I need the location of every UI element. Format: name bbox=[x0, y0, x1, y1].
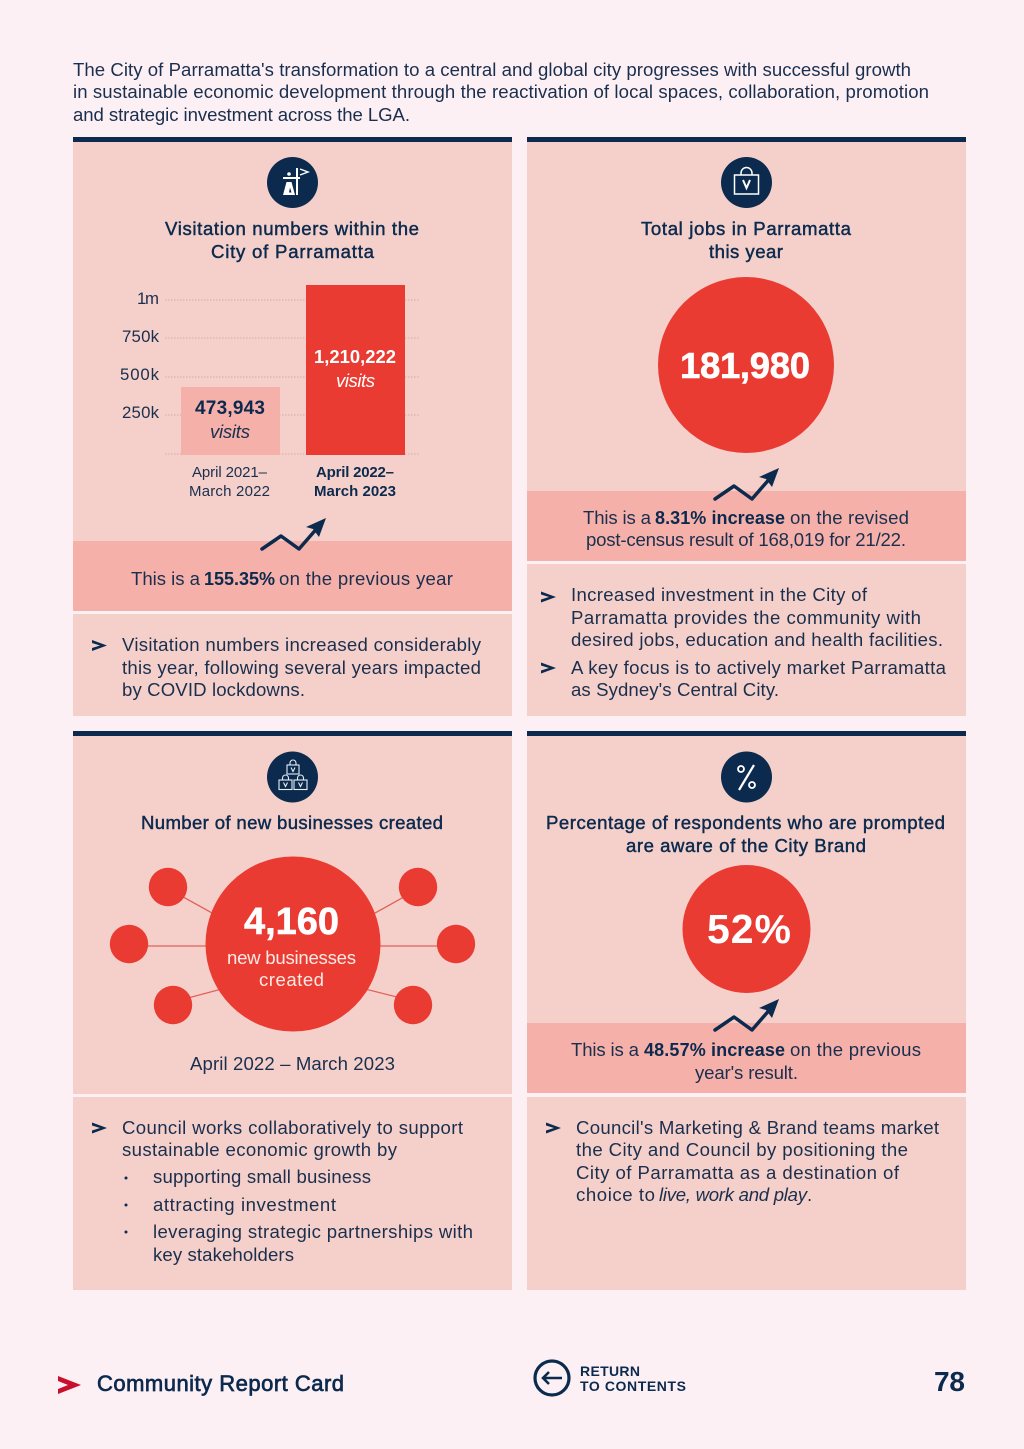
arrow: trend up bbox=[715, 468, 779, 499]
intro text: in sustainable economic development through the reactivation of local spaces, collaboration, promotion bbox=[73, 81, 929, 102]
intro text: and strategic investment across the LGA. bbox=[73, 104, 410, 125]
heading: brand awareness: Percentage of respondents who are prompted bbox=[546, 812, 945, 833]
hub diagram: 4,160 new businesses: new businesses bbox=[227, 947, 356, 968]
hub diagram: 4,160 new businesses bbox=[110, 856, 475, 1032]
heading: visitation numbers: City of Parramatta bbox=[211, 241, 375, 262]
hub diagram: 4,160 new businesses: created bbox=[259, 969, 324, 990]
heading: new businesses: Number of new businesses created bbox=[141, 812, 443, 833]
stat circle: 181,980 bbox=[658, 277, 834, 453]
heading: total jobs: this year bbox=[709, 241, 783, 262]
heading: total jobs: Total jobs in Parramatta bbox=[641, 218, 852, 239]
text block: business notes: Council works collaboratively to support bbox=[122, 1117, 464, 1138]
stat circle: 181,980: 181,980 bbox=[680, 345, 810, 386]
text block: business notes: leveraging strategic partnerships with bbox=[153, 1221, 473, 1242]
bar: 2021-22: visits bbox=[210, 421, 250, 442]
text block: business notes bbox=[73, 1097, 512, 1290]
text block: brand notes: live, work and play bbox=[659, 1184, 809, 1205]
arrow: trend up bbox=[262, 518, 326, 549]
text block: brand notes: . bbox=[807, 1184, 812, 1205]
bar chart: visits: 250k bbox=[122, 403, 160, 422]
text block: brand notes: City of Parramatta as a destination of bbox=[576, 1162, 900, 1183]
text block: brand notes bbox=[527, 1097, 966, 1290]
bar: 2022-23: visits bbox=[336, 370, 375, 391]
intro text bbox=[73, 59, 929, 125]
text block: jobs notes: Parramatta provides the community with bbox=[571, 607, 921, 628]
text block: brand notes: Council's Marketing & Brand teams market bbox=[576, 1117, 940, 1138]
panel: visitation numbers bbox=[73, 137, 512, 716]
text block: business notes: sustainable economic growth by bbox=[122, 1139, 398, 1160]
heading: visitation numbers bbox=[165, 218, 419, 262]
callout band: 155.35% bbox=[73, 541, 512, 611]
footer: return to contents: TO CONTENTS bbox=[580, 1378, 686, 1394]
callout band: 155.35%: on the previous year bbox=[279, 568, 453, 589]
icon: signpost and person bbox=[267, 157, 318, 208]
text block: brand notes: the City and Council by positioning the bbox=[576, 1139, 908, 1160]
heading: brand awareness: are aware of the City Brand bbox=[626, 835, 866, 856]
bar chart: visits: 1m bbox=[137, 289, 159, 308]
text block: jobs notes: Increased investment in the City of bbox=[571, 584, 868, 605]
text block: visitation note: this year, following several years impacted bbox=[122, 657, 481, 678]
axis label: 2022-23 bbox=[314, 464, 396, 500]
bar: 2021-22: 473,943 bbox=[195, 398, 265, 419]
axis label: 2021-22 bbox=[189, 464, 270, 500]
heading: brand awareness bbox=[546, 812, 945, 856]
text block: jobs notes: A key focus is to actively market Parramatta bbox=[571, 657, 947, 678]
bar: 2022-23 bbox=[306, 285, 405, 455]
axis label: 2021-22: April 2021– bbox=[192, 464, 268, 481]
stat circle: 52%: 52% bbox=[707, 906, 791, 952]
axis label: 2022-23: March 2023 bbox=[314, 483, 396, 500]
bar chart: visits bbox=[120, 285, 420, 500]
footer: return to contents bbox=[535, 1361, 686, 1395]
callout band: 8.31%: This is a bbox=[583, 507, 652, 528]
callout band: 8.31%: 8.31% increase bbox=[655, 508, 785, 528]
bar chart: visits: 500k bbox=[120, 365, 160, 384]
date label: April 2022 – March 2023 bbox=[190, 1053, 395, 1074]
panel: total jobs bbox=[527, 137, 966, 716]
hub diagram: 4,160 new businesses: 4,160 bbox=[244, 901, 339, 943]
text block: business notes: attracting investment bbox=[153, 1194, 337, 1215]
axis label: 2022-23: April 2022– bbox=[316, 464, 394, 481]
text block: visitation note: by COVID lockdowns. bbox=[122, 679, 305, 700]
text block: business notes: key stakeholders bbox=[153, 1244, 294, 1265]
callout band: 8.31%: post-census result of 168,019 for 21/22. bbox=[586, 529, 906, 550]
arrow: trend up bbox=[715, 999, 779, 1030]
footer: return to contents: RETURN bbox=[580, 1363, 640, 1379]
callout band: 48.57%: year's result. bbox=[695, 1062, 798, 1083]
stat circle: 52% bbox=[682, 865, 810, 993]
callout band: 8.31%: on the revised bbox=[790, 507, 909, 528]
callout band: 48.57%: 48.57% increase bbox=[644, 1040, 785, 1060]
text block: brand notes: choice to bbox=[576, 1184, 655, 1205]
icon: shopping bag bbox=[721, 157, 772, 208]
bar: 2022-23: 1,210,222 bbox=[314, 346, 396, 367]
callout band: 48.57% bbox=[527, 1023, 966, 1093]
text block: jobs notes bbox=[527, 564, 966, 716]
text block: visitation note bbox=[73, 614, 512, 716]
panel: new businesses bbox=[73, 731, 512, 1094]
bar chart: visits: 750k bbox=[122, 327, 160, 346]
panel: brand awareness bbox=[527, 731, 966, 1093]
callout band: 155.35%: 155.35% bbox=[204, 569, 275, 589]
callout band: 155.35%: This is a bbox=[131, 568, 201, 589]
text block: visitation note: Visitation numbers increased considerably bbox=[122, 634, 482, 655]
footer: page number: 78 bbox=[934, 1366, 965, 1397]
icon: three bags bbox=[267, 752, 318, 802]
axis label: 2021-22: March 2022 bbox=[189, 483, 270, 500]
callout band: 8.31% bbox=[527, 491, 966, 561]
text block: business notes: supporting small business bbox=[153, 1166, 371, 1187]
text block: jobs notes: as Sydney's Central City. bbox=[571, 679, 779, 700]
heading: visitation numbers: Visitation numbers within the bbox=[165, 218, 419, 239]
icon: percent bbox=[721, 752, 772, 802]
callout band: 48.57%: on the previous bbox=[790, 1039, 921, 1060]
callout band: 48.57%: This is a bbox=[571, 1039, 640, 1060]
bar: 2021-22 bbox=[181, 387, 280, 455]
intro text: The City of Parramatta's transformation to a central and global city progresses with successful growth bbox=[73, 59, 911, 80]
footer: section title: Community Report Card bbox=[97, 1371, 344, 1396]
text block: jobs notes: desired jobs, education and health facilities. bbox=[571, 629, 943, 650]
heading: total jobs bbox=[641, 218, 852, 262]
